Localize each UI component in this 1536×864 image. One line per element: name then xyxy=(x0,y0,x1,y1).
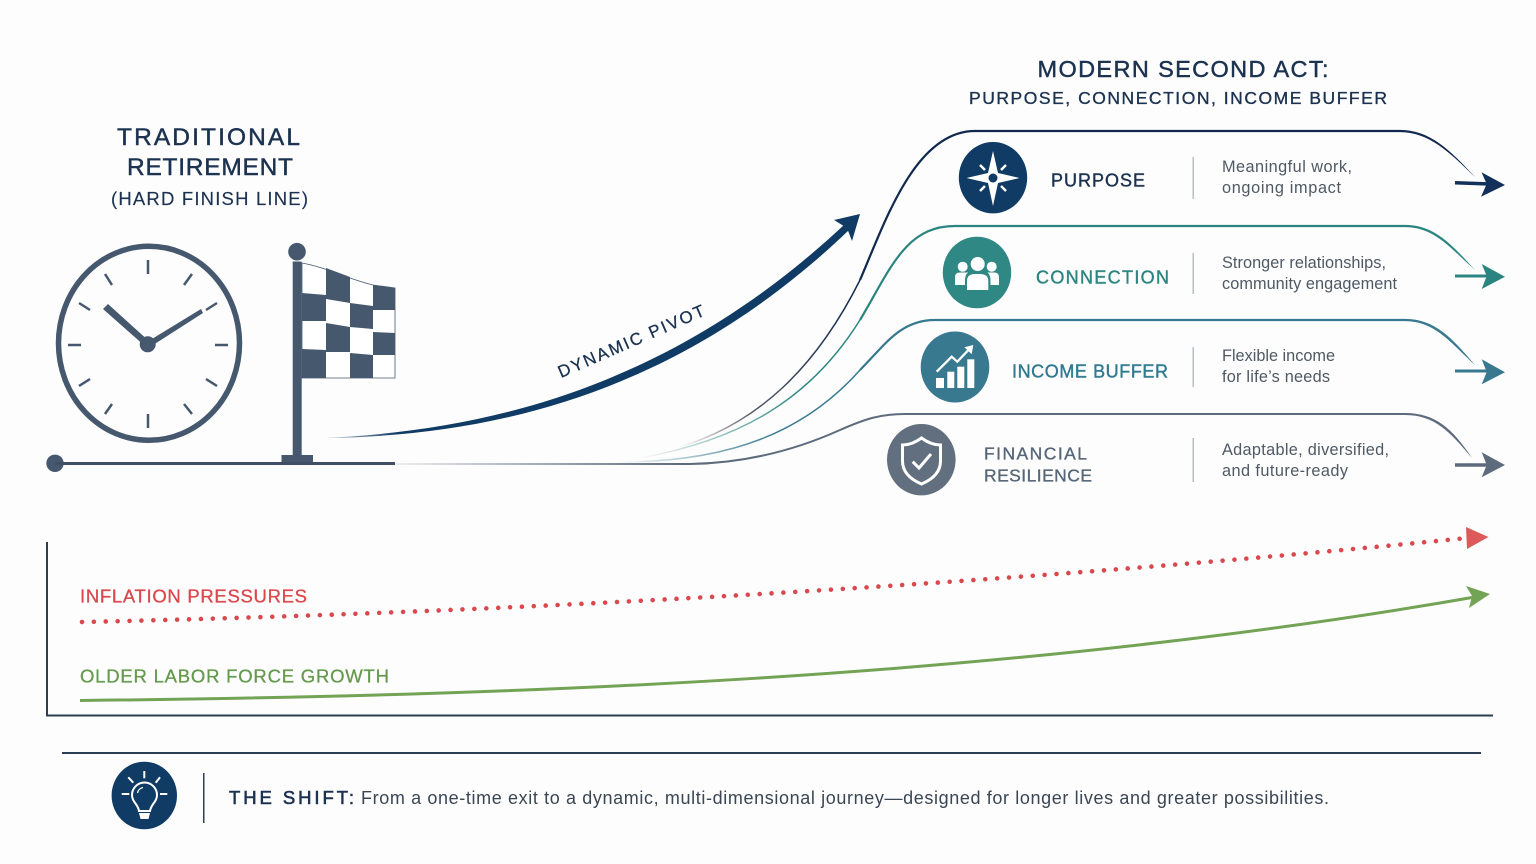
label: older labor force growth: OLDER LABOR FORCE GROWTH xyxy=(80,666,389,686)
heading: traditional retirement: (HARD FINISH LINE) xyxy=(111,188,308,209)
heading: traditional retirement: TRADITIONAL xyxy=(117,124,300,151)
line: labor force growth xyxy=(80,586,1490,700)
label: financial resilience: FINANCIAL xyxy=(984,444,1087,464)
label: inflation pressures: INFLATION PRESSURES xyxy=(80,586,307,606)
icon: lightbulb xyxy=(112,762,177,829)
description: income buffer: for life’s needs xyxy=(1222,368,1330,386)
heading: traditional retirement xyxy=(111,124,308,209)
icon: checkered finish flag xyxy=(282,243,395,464)
label: dynamic pivot: DYNAMIC PIVOT xyxy=(555,301,707,382)
arrow: dynamic pivot xyxy=(325,214,860,438)
curve: financial resilience xyxy=(395,413,1505,477)
arrow: income buffer xyxy=(1455,359,1505,384)
description: financial resilience: and future-ready xyxy=(1222,462,1349,480)
description: purpose: ongoing impact xyxy=(1222,179,1341,197)
description: purpose: Meaningful work, xyxy=(1222,158,1352,176)
label: connection: CONNECTION xyxy=(1036,268,1169,288)
description: connection: Stronger relationships, xyxy=(1222,254,1386,272)
footer text: From a one-time exit to a dynamic, multi-dimensional journey—designed for longer lives and greater possibilities. xyxy=(361,788,1329,808)
heading: modern second act: MODERN SECOND ACT: xyxy=(1038,56,1328,82)
dotted line: inflation xyxy=(82,527,1488,622)
row: connection xyxy=(943,237,1397,308)
footer text: THE SHIFT: xyxy=(229,787,354,808)
footer: the shift xyxy=(62,752,1481,829)
row: financial resilience xyxy=(887,424,1389,495)
description: connection: community engagement xyxy=(1222,275,1397,293)
arrow: purpose xyxy=(1455,172,1505,197)
timeline baseline xyxy=(46,455,395,472)
label: financial resilience: RESILIENCE xyxy=(984,466,1092,486)
heading: modern second act: PURPOSE, CONNECTION, INCOME BUFFER xyxy=(969,88,1387,108)
arrow: connection xyxy=(1455,264,1505,289)
row: purpose xyxy=(959,142,1352,213)
curve: purpose xyxy=(660,130,1505,452)
icon: shield check xyxy=(887,424,956,495)
icon: people group xyxy=(943,237,1011,308)
chart axes xyxy=(47,542,1493,716)
curve: income buffer xyxy=(620,319,1505,462)
label: purpose: PURPOSE xyxy=(1051,170,1145,190)
row: income buffer xyxy=(921,332,1335,402)
icon: clock xyxy=(58,246,240,440)
icon: growth chart xyxy=(921,332,989,402)
heading: modern second act xyxy=(969,56,1387,108)
label: income buffer: INCOME BUFFER xyxy=(1012,362,1168,382)
description: income buffer: Flexible income xyxy=(1222,347,1335,365)
chart: trend lines xyxy=(47,527,1493,716)
curve: connection xyxy=(640,225,1505,458)
arrow: financial resilience xyxy=(1455,452,1505,477)
heading: traditional retirement: RETIREMENT xyxy=(127,154,293,181)
description: financial resilience: Adaptable, diversified, xyxy=(1222,441,1389,459)
icon: compass star xyxy=(959,142,1027,213)
